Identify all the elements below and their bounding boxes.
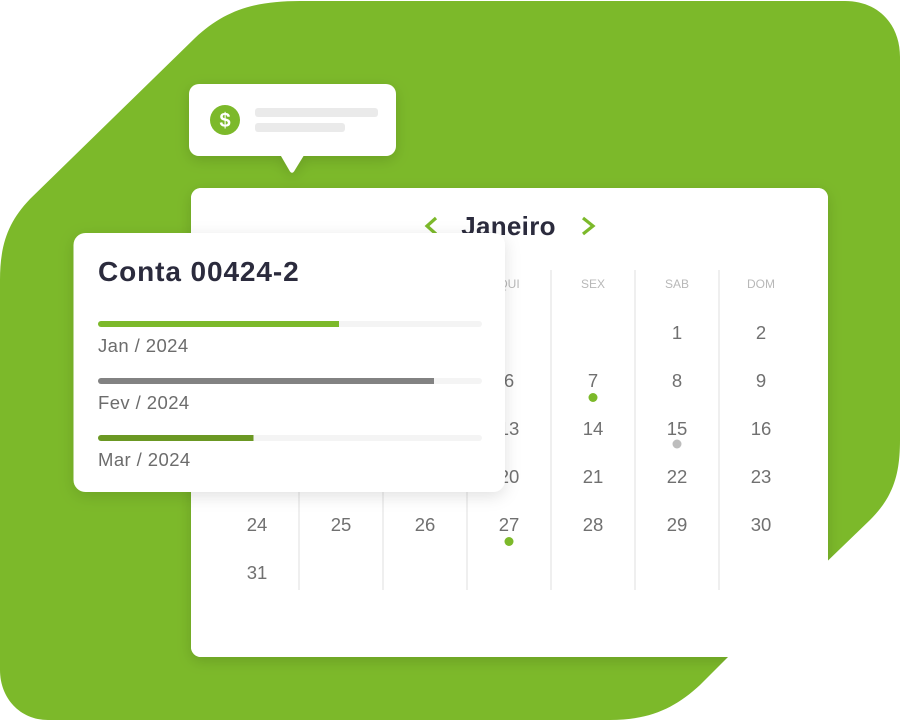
calendar day numbers: 16 — [751, 418, 771, 439]
calendar day numbers: 29 — [667, 514, 687, 535]
progress: March: Mar / 2024 — [98, 449, 191, 470]
calendar panel — [191, 188, 828, 657]
calendar day numbers: 13 — [499, 418, 519, 439]
weekday headers: TER — [329, 277, 353, 291]
weekday headers: QUA — [412, 277, 438, 291]
calendar day numbers: 21 — [583, 466, 603, 487]
calendar day numbers: 18 — [331, 466, 351, 487]
calendar day numbers: 6 — [504, 370, 514, 391]
calendar day numbers: 22 — [667, 466, 687, 487]
weekday headers: QUI — [498, 277, 520, 291]
calendar day numbers: 5 — [420, 370, 430, 391]
icon: next month chevron — [583, 218, 593, 234]
calendar day numbers: 28 — [583, 514, 603, 535]
month heading — [427, 211, 593, 241]
weekday headers: SEX — [581, 277, 605, 291]
calendar day numbers — [247, 322, 771, 583]
progress: January — [98, 321, 482, 356]
calendar day numbers: 7 — [588, 370, 598, 391]
calendar day numbers: 3 — [252, 370, 262, 391]
progress: February — [98, 378, 482, 413]
account title: Conta 00424-2 — [98, 256, 300, 287]
notification callout — [189, 84, 396, 173]
weekday headers: SAB — [665, 277, 689, 291]
icon: dollar coin — [210, 105, 240, 135]
placeholder text lines — [255, 108, 378, 132]
calendar day numbers: 17 — [247, 466, 267, 487]
calendar day numbers: 26 — [415, 514, 435, 535]
month name: Janeiro — [461, 211, 556, 241]
progress: March — [98, 435, 482, 470]
calendar day numbers: 31 — [247, 562, 267, 583]
calendar day numbers: 4 — [336, 370, 346, 391]
calendar day numbers: 11 — [331, 418, 351, 439]
calendar day numbers: 12 — [415, 418, 435, 439]
progress: February: Fev / 2024 — [98, 392, 190, 413]
calendar day numbers: 25 — [331, 514, 351, 535]
icon: dollar coin: $ — [219, 110, 231, 132]
calendar day numbers: 15 — [667, 418, 687, 439]
calendar day numbers: 8 — [672, 370, 682, 391]
calendar day numbers: 2 — [756, 322, 766, 343]
event markers — [504, 393, 682, 546]
calendar day numbers: 20 — [499, 466, 519, 487]
icon: previous month chevron — [427, 218, 436, 234]
calendar day numbers: 23 — [751, 466, 771, 487]
calendar day numbers: 24 — [247, 514, 267, 535]
calendar day numbers: 19 — [415, 466, 435, 487]
calendar day numbers: 1 — [672, 322, 682, 343]
calendar day numbers: 27 — [499, 514, 519, 535]
account panel — [74, 233, 505, 492]
calendar day numbers: 9 — [756, 370, 766, 391]
calendar day numbers: 10 — [247, 418, 267, 439]
weekday headers: DOM — [747, 277, 775, 291]
progress: January: Jan / 2024 — [98, 335, 189, 356]
weekday headers: SEG — [244, 277, 270, 291]
calendar day numbers: 30 — [751, 514, 771, 535]
weekday headers — [244, 277, 775, 291]
calendar day numbers: 14 — [583, 418, 603, 439]
